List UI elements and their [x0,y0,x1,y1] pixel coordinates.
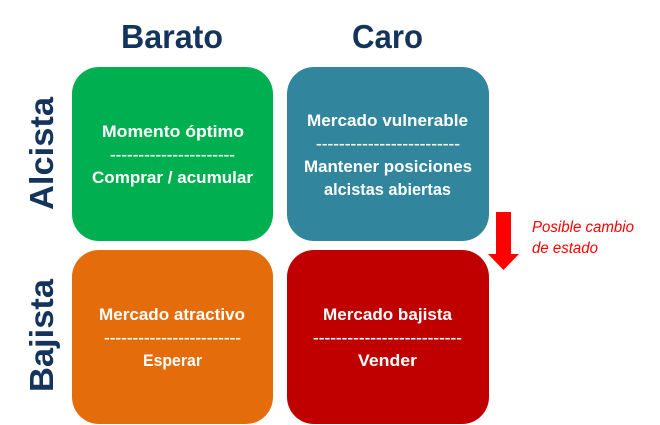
panel divider: ---------------------- [110,147,235,162]
panel: mercado atractivo [72,250,273,424]
panel action: Comprar / acumular [92,168,253,187]
panel title: Mercado bajista [323,305,453,324]
panel divider: ------------------------- [316,136,460,151]
callout: posible cambio de estado [532,219,634,257]
callout: posible cambio de estado: de estado [532,240,598,257]
panel title: Momento óptimo [102,122,244,141]
row heading: Bajista: Bajista [23,278,60,392]
panel action: Vender [358,351,417,370]
callout: posible cambio de estado: Posible cambio [532,219,634,236]
panel divider: -------------------------- [313,330,462,345]
panel title: Mercado atractivo [99,305,245,324]
panel: mercado bajista [287,250,489,424]
heading: Caro: Caro [352,18,423,55]
panel divider: ------------------------ [104,330,241,345]
row heading: Alcista: Alcista [23,96,60,210]
panel: mercado vulnerable [287,67,489,241]
panel action second line: alcistas abiertas [324,180,451,199]
panel: momento optimo [72,67,273,241]
panel title: Mercado vulnerable [307,111,468,130]
panel action: Mantener posiciones [304,157,472,176]
panel action: Esperar [143,351,202,370]
arrow: change of state [488,212,519,270]
heading: Barato: Barato [121,18,223,55]
